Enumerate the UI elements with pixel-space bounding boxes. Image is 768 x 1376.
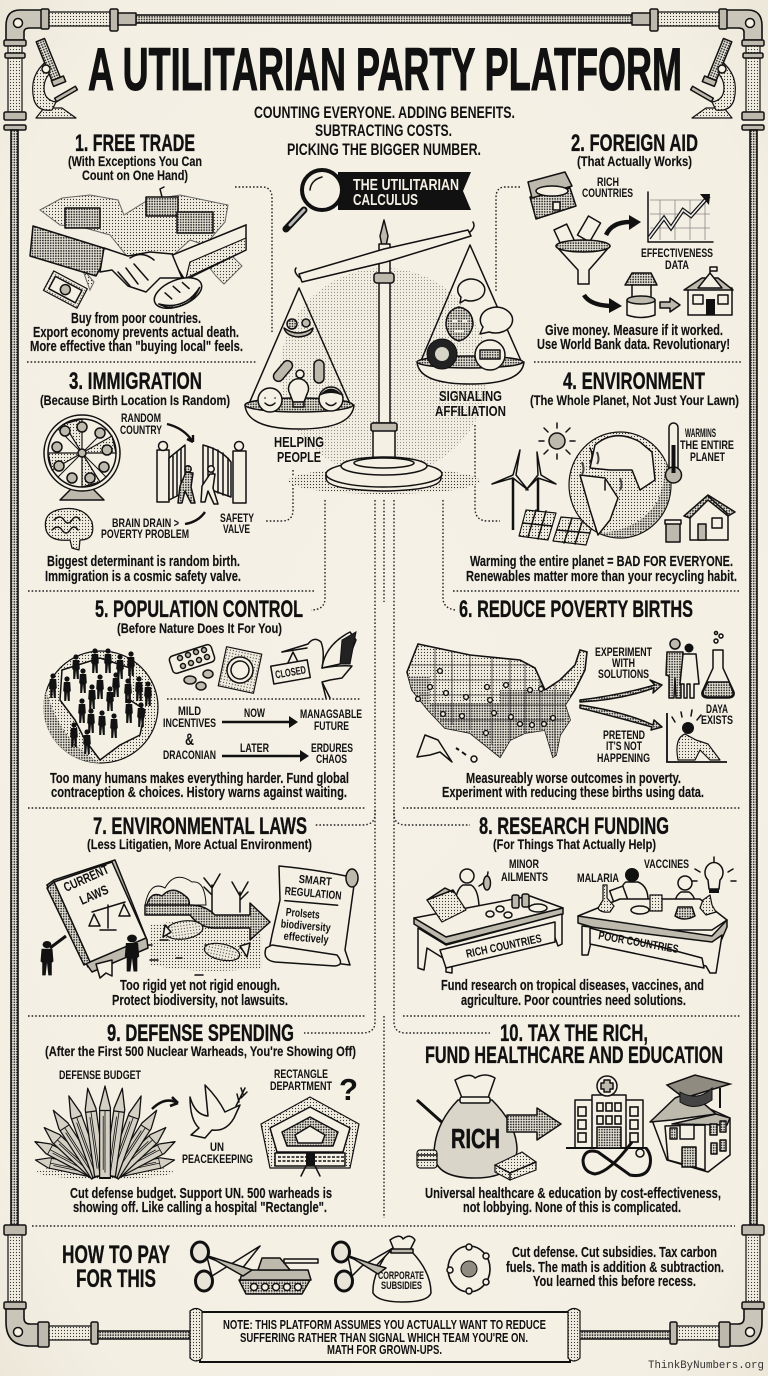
heading: FOR THIS bbox=[76, 1265, 156, 1293]
label: helping people: PEOPLE bbox=[277, 449, 321, 466]
panel: tax the rich bbox=[417, 1020, 730, 1216]
body text bbox=[442, 771, 704, 801]
icon: graduation house bbox=[650, 1075, 730, 1172]
icon: balance scale bbox=[248, 220, 522, 491]
panel: reduce poverty births bbox=[405, 596, 734, 801]
icon: sun bbox=[539, 423, 575, 459]
body text: Biggest determinant is random birth. bbox=[47, 554, 240, 570]
body text: Buy from poor countries. bbox=[71, 311, 201, 327]
body text: contraception & choices. History warns against waiting. bbox=[51, 785, 347, 801]
diagram: incentives versus draconian bbox=[163, 699, 362, 766]
label: rich countries: COUNTRIES bbox=[582, 188, 633, 200]
icon: prize wheel bbox=[44, 415, 120, 500]
panel: foreign aid bbox=[528, 130, 733, 353]
heading: 8. RESEARCH FUNDING bbox=[479, 813, 669, 840]
icon: law book: CURRENT bbox=[61, 861, 111, 895]
body text: Protect biodiversity, not lawsuits. bbox=[112, 993, 288, 1009]
banner: the utilitarian calculus bbox=[338, 172, 471, 210]
label: pretend: PRETEND bbox=[603, 730, 645, 742]
label: warming planet: THE ENTIRE bbox=[680, 440, 734, 452]
banner: note: MATH FOR GROWN-UPS. bbox=[327, 1342, 442, 1357]
icon: carbon atom bbox=[447, 1244, 490, 1294]
arrow: pretend bbox=[580, 705, 662, 730]
icon: scissors over bag bbox=[332, 1242, 393, 1291]
label: safety valve: SAFETY bbox=[220, 513, 254, 525]
left pan: helping people bbox=[245, 319, 354, 429]
icon: thermometer bbox=[666, 423, 682, 483]
label: minor ailments: MINOR bbox=[509, 859, 540, 871]
right pan: signaling affiliation bbox=[417, 279, 524, 384]
subtitle: PICKING THE BIGGER NUMBER. bbox=[287, 140, 481, 159]
map: united states bbox=[405, 644, 587, 763]
label: random country: RANDOM bbox=[121, 413, 161, 425]
icon: solar panels bbox=[519, 510, 594, 545]
icon: planet earth bbox=[569, 432, 671, 538]
label: data exists: DAYA bbox=[706, 704, 728, 716]
label: experiment with solutions: WITH bbox=[612, 658, 635, 670]
banner: the utilitarian calculus: THE UTILITARIAN bbox=[353, 177, 459, 194]
diagram: incentives versus draconian: FUTURE bbox=[314, 721, 349, 733]
icon: scissors over tank bbox=[192, 1242, 260, 1291]
connector lines bbox=[235, 187, 520, 1218]
label: rectangle department bbox=[270, 1069, 332, 1093]
body text: Measureably worse outcomes in poverty. bbox=[466, 771, 681, 787]
label: helping people bbox=[274, 434, 324, 466]
icon: corporate subsidies bag: SUBSIDIES bbox=[381, 1280, 422, 1292]
subheading: (Less Litigatien, More Actual Environment) bbox=[87, 836, 312, 852]
icon: hospital bbox=[566, 1076, 647, 1148]
icon: corporate subsidies bag: CORPORATE bbox=[378, 1270, 424, 1282]
diagram: incentives versus draconian: INCENTIVES bbox=[163, 718, 216, 730]
panel: how to pay for this bbox=[62, 1236, 724, 1302]
icon: sad person bbox=[667, 710, 727, 762]
arrow: experiment bbox=[580, 680, 662, 702]
label: effectiveness data: DATA bbox=[665, 260, 689, 272]
section dividers bbox=[27, 362, 741, 1226]
icon: house and bin bbox=[665, 495, 735, 542]
diagram: incentives versus draconian: MANAGSABLE bbox=[300, 709, 362, 721]
panel: defense spending bbox=[32, 1020, 359, 1216]
label: rich countries bbox=[582, 177, 633, 200]
icon: smart regulation scroll: biodiversity bbox=[280, 918, 332, 935]
label: safety valve: VALVE bbox=[223, 524, 250, 536]
subheading: (After the First 500 Nuclear Warheads, You're Showing Off) bbox=[45, 1043, 356, 1059]
heading: 10. TAX THE RICH, bbox=[500, 1020, 648, 1047]
subheading bbox=[68, 153, 202, 183]
label: rectangle department: DEPARTMENT bbox=[270, 1081, 332, 1093]
subheading: (Before Nature Does It For You) bbox=[117, 620, 282, 636]
icon: smart regulation scroll: effectively bbox=[283, 931, 330, 947]
label: experiment with solutions bbox=[595, 647, 652, 681]
label: vaccines: VACCINES bbox=[644, 859, 689, 871]
label: random country: COUNTRY bbox=[120, 425, 162, 437]
label: un peacekeeping: UN bbox=[210, 1142, 224, 1154]
icon: smart regulation scroll bbox=[265, 866, 358, 966]
body text bbox=[425, 1186, 721, 1216]
icon: stork with closed sign: CLOSED bbox=[274, 664, 307, 681]
icon: peace dove bbox=[190, 1085, 247, 1138]
diagram: incentives versus draconian: LATER bbox=[240, 743, 270, 755]
heading: 4. ENVIRONMENT bbox=[563, 368, 705, 395]
subtitle: COUNTING EVERYONE. ADDING BENEFITS. bbox=[254, 103, 515, 122]
label: pretend: IT'S NOT bbox=[606, 741, 642, 753]
label: un peacekeeping: PEACEKEEPING bbox=[182, 1154, 253, 1166]
label: data exists bbox=[701, 704, 733, 727]
arrows bbox=[584, 215, 680, 313]
icon: light bulb bbox=[692, 857, 736, 893]
body text bbox=[441, 978, 704, 1009]
label: effectiveness data: EFFECTIVENESS bbox=[641, 248, 713, 260]
halftone halo bbox=[280, 268, 488, 494]
subheading: Count on One Hand) bbox=[82, 167, 188, 183]
icon: poor countries desk: POOR COUNTRIES bbox=[597, 930, 679, 956]
icon: contraceptive pills bbox=[168, 644, 216, 690]
subtitle: SUBTRACTING COSTS. bbox=[315, 121, 452, 140]
subtitle bbox=[254, 103, 515, 159]
label: brain drain bbox=[101, 518, 189, 541]
label: helping people: HELPING bbox=[274, 434, 324, 451]
subheading: (For Things That Actually Help) bbox=[493, 836, 656, 852]
body text: Immigration is a cosmic safety valve. bbox=[45, 569, 241, 585]
body text bbox=[537, 323, 730, 353]
heading: HOW TO PAY bbox=[62, 1241, 170, 1269]
label: pretend bbox=[597, 730, 650, 765]
icon: couple bbox=[666, 639, 699, 698]
body text: Too many humans makes everything harder. Fund global bbox=[50, 771, 349, 787]
icon: law book bbox=[47, 860, 148, 978]
banner: note: NOTE: THIS PLATFORM ASSUMES YOU ACTUALLY WANT TO REDUCE bbox=[223, 1317, 546, 1332]
body text: You learned this before recess. bbox=[533, 1274, 696, 1290]
label: brain drain: BRAIN DRAIN > bbox=[112, 518, 179, 530]
icon: magnifying glass bbox=[286, 170, 342, 229]
icon: smart regulation scroll: REGULATION bbox=[284, 886, 342, 903]
diagram: incentives versus draconian: & bbox=[185, 730, 194, 749]
label: signaling affiliation: SIGNALING bbox=[439, 388, 502, 405]
label: brain drain: POVERTY PROBLEM bbox=[101, 529, 189, 541]
body text: Export economy prevents actual death. bbox=[33, 325, 239, 341]
icon: water well bbox=[625, 273, 657, 318]
panel: population control bbox=[43, 596, 362, 801]
panel: utilitarian calculus scale bbox=[245, 170, 524, 494]
icon: school bbox=[684, 267, 733, 315]
heading bbox=[425, 1020, 723, 1069]
heading: 3. IMMIGRATION bbox=[69, 368, 202, 395]
icon: lawyers bbox=[41, 935, 139, 975]
heading: 5. POPULATION CONTROL bbox=[95, 596, 303, 623]
panel: immigration bbox=[40, 368, 254, 585]
label: malaria: MALARIA bbox=[577, 873, 619, 885]
arrow bbox=[507, 1108, 561, 1140]
diagram: incentives versus draconian: NOW bbox=[244, 708, 265, 720]
heading: 1. FREE TRADE bbox=[75, 130, 195, 157]
icon: bread bbox=[150, 272, 206, 314]
icon: condom wrapper bbox=[218, 647, 262, 693]
diagram: incentives versus draconian: ERDURES bbox=[311, 743, 353, 755]
body text: More effective than "buying local" feels. bbox=[30, 339, 243, 355]
icon: rich countries desk bbox=[414, 869, 563, 973]
icon: smart regulation scroll: SMART bbox=[298, 874, 332, 889]
label: warming planet: WARMINS bbox=[685, 428, 716, 440]
panel: free trade bbox=[30, 130, 246, 355]
body text bbox=[45, 554, 241, 585]
arrow bbox=[152, 1097, 178, 1109]
body text: showing off. Like calling a hospital "Rectangle". bbox=[73, 1200, 327, 1216]
chart: effectiveness bbox=[648, 192, 713, 242]
heading: 9. DEFENSE SPENDING bbox=[107, 1020, 294, 1047]
label: minor ailments: AILMENTS bbox=[501, 872, 548, 884]
heading: 2. FOREIGN AID bbox=[571, 130, 698, 157]
diagram: incentives versus draconian: MILD bbox=[178, 706, 201, 718]
icon: rich money bag: RICH bbox=[451, 1123, 500, 1154]
icon: poor countries desk bbox=[578, 868, 727, 973]
icon: corporate subsidies bag bbox=[373, 1236, 431, 1302]
label: defense budget: DEFENSE BUDGET bbox=[59, 1070, 141, 1082]
label: data exists: EXISTS bbox=[701, 715, 733, 727]
icon: tank bbox=[239, 1258, 318, 1294]
subheading: (Because Birth Location Is Random) bbox=[40, 392, 230, 408]
body text bbox=[466, 554, 737, 585]
body text bbox=[50, 771, 349, 801]
body text: not lobbying. None of this is complicated. bbox=[463, 1200, 681, 1216]
icon: law book: LAWS bbox=[77, 882, 111, 908]
body text bbox=[506, 1245, 724, 1290]
panel: environment bbox=[466, 368, 739, 585]
label: experiment with solutions: SOLUTIONS bbox=[598, 669, 649, 681]
label: un peacekeeping bbox=[182, 1142, 253, 1166]
heading: 7. ENVIRONMENTAL LAWS bbox=[93, 813, 307, 840]
icon: nuclear missiles bbox=[32, 1086, 178, 1179]
body text bbox=[70, 1186, 332, 1216]
icon: rich countries desk: RICH COUNTRIES bbox=[465, 933, 543, 961]
banner: note: SUFFERING RATHER THAN SIGNAL WHICH TEAM YOU'RE ON. bbox=[240, 1330, 528, 1345]
icon: handshake bbox=[30, 225, 246, 292]
heading bbox=[62, 1241, 170, 1293]
icon: dollar bill bbox=[43, 271, 87, 308]
icon: wind turbines bbox=[492, 450, 556, 530]
attribution: ThinkByNumbers.org bbox=[648, 1360, 764, 1372]
icon: world map and containers bbox=[40, 187, 242, 290]
panel: environmental laws bbox=[41, 813, 358, 1009]
arrow bbox=[185, 512, 205, 524]
panel: research funding bbox=[414, 813, 736, 1009]
icon: money funnel bbox=[554, 216, 610, 284]
diagram: incentives versus draconian: CHAOS bbox=[316, 754, 347, 766]
body text bbox=[112, 978, 288, 1009]
body text: Too rigid yet not rigid enough. bbox=[120, 978, 280, 994]
label: signaling affiliation: AFFILIATION bbox=[435, 403, 506, 420]
body text bbox=[30, 311, 243, 355]
icon: cane bbox=[417, 1100, 445, 1125]
label: safety valve bbox=[220, 513, 254, 536]
icon: question mark: ? bbox=[339, 1072, 358, 1107]
icon: river landscape bbox=[145, 874, 270, 975]
icon: pentagon bbox=[261, 1097, 359, 1176]
banner: the utilitarian calculus: CALCULUS bbox=[353, 192, 418, 209]
subheading: (That Actually Works) bbox=[577, 153, 692, 169]
icon: open gates and migrants bbox=[157, 442, 246, 504]
subheading: (With Exceptions You Can bbox=[68, 153, 202, 169]
label: minor ailments bbox=[501, 859, 548, 884]
label: warming planet: PLANET bbox=[690, 452, 725, 464]
label: warming planet bbox=[680, 428, 734, 464]
icon: rich money bag bbox=[417, 1075, 536, 1180]
label: random country bbox=[120, 413, 162, 437]
diagram: incentives versus draconian: DRACONIAN bbox=[163, 750, 216, 762]
icon: stork with closed sign bbox=[271, 632, 356, 698]
label: signaling affiliation bbox=[435, 388, 506, 420]
arrow bbox=[167, 424, 193, 442]
label: effectiveness data bbox=[641, 248, 713, 272]
icon: smart regulation scroll: Prolsets bbox=[285, 907, 320, 922]
label: rectangle department: RECTANGLE bbox=[274, 1069, 328, 1081]
body text: Cut defense budget. Support UN. 500 warheads is bbox=[70, 1186, 332, 1202]
body text: agriculture. Poor countries need solutions. bbox=[461, 993, 686, 1009]
label: experiment with solutions: EXPERIMENT bbox=[595, 647, 652, 659]
label: rich countries: RICH bbox=[597, 177, 619, 189]
icon: flask bbox=[702, 632, 734, 698]
icon: brain bbox=[45, 509, 93, 550]
icon: stethoscope bbox=[583, 1142, 650, 1176]
icon: crowded globe bbox=[43, 648, 158, 763]
icon: treasure chest bbox=[528, 172, 576, 219]
label: pretend: HAPPENING bbox=[597, 753, 650, 765]
banner: note bbox=[190, 1308, 580, 1362]
